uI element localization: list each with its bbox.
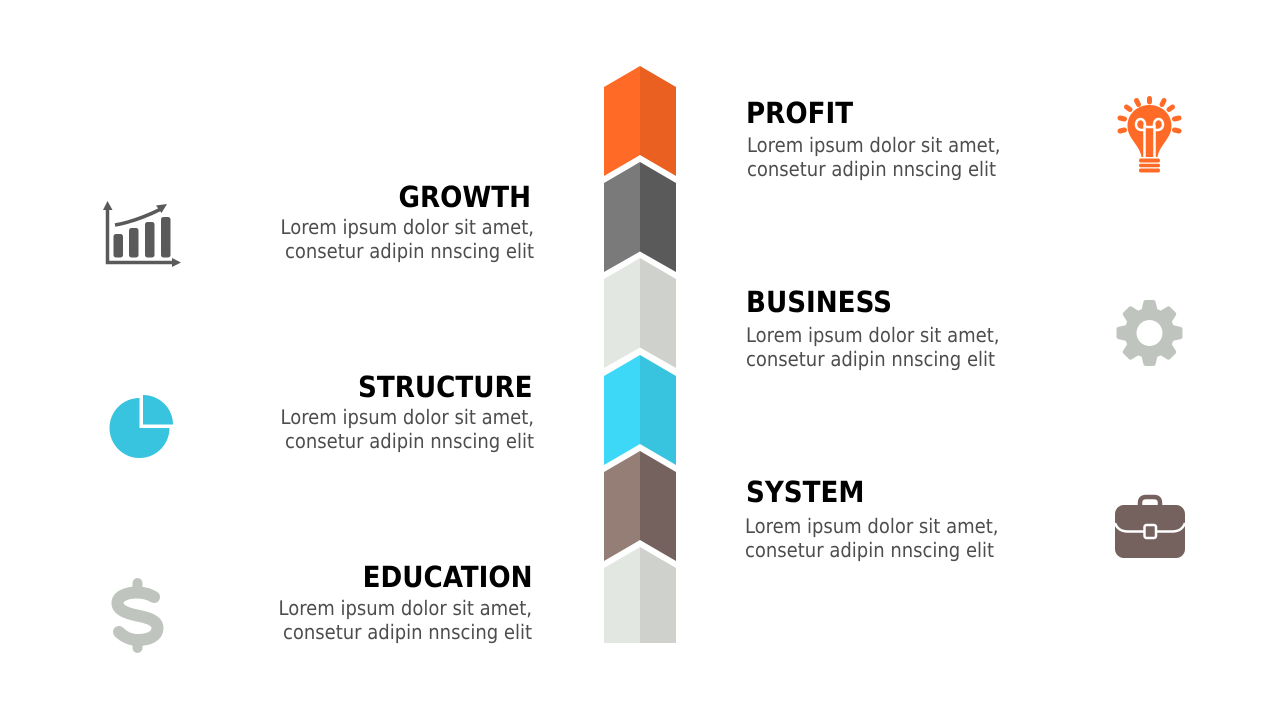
text block: system <box>745 475 998 562</box>
text block: education: consetur adipin nnscing elit <box>283 620 532 644</box>
chevron: light grey base <box>604 547 676 643</box>
text block: structure: Lorem ipsum dolor sit amet, <box>281 405 534 429</box>
text block: system: SYSTEM <box>746 475 864 509</box>
central chevron column <box>604 66 676 643</box>
chevron: brown <box>604 451 676 561</box>
text block: business: consetur adipin nnscing elit <box>746 347 995 371</box>
icon: light bulb <box>1120 98 1179 172</box>
text block: profit <box>746 96 1000 181</box>
chevron: dark grey <box>604 162 676 272</box>
text block: education: EDUCATION <box>363 560 532 594</box>
text block: structure: consetur adipin nnscing elit <box>285 429 534 453</box>
chevron: orange <box>604 66 676 176</box>
text block: structure <box>281 370 534 453</box>
text block: system: consetur adipin nnscing elit <box>745 538 994 562</box>
text block: growth: GROWTH <box>398 180 531 214</box>
text block: education: Lorem ipsum dolor sit amet, <box>279 596 532 620</box>
text block: education <box>279 560 532 644</box>
icon: pie chart <box>110 395 173 458</box>
text block: profit: Lorem ipsum dolor sit amet, <box>747 133 1000 157</box>
text block: growth: Lorem ipsum dolor sit amet, <box>281 215 534 239</box>
text block: profit: consetur adipin nnscing elit <box>747 157 996 181</box>
icon: gear <box>1116 300 1182 366</box>
chevron: blue <box>604 355 676 465</box>
icon: briefcase <box>1115 497 1185 558</box>
text block: business: Lorem ipsum dolor sit amet, <box>746 323 999 347</box>
text block: growth: consetur adipin nnscing elit <box>285 239 534 263</box>
text block: structure: STRUCTURE <box>358 370 532 404</box>
icon: dollar sign <box>118 583 158 648</box>
text block: business: BUSINESS <box>746 285 892 319</box>
text block: profit: PROFIT <box>746 96 853 130</box>
icon: growth chart <box>103 201 181 267</box>
text block: system: Lorem ipsum dolor sit amet, <box>745 514 998 538</box>
text block: growth <box>281 180 534 263</box>
chevron: light grey <box>604 258 676 368</box>
text block: business <box>746 285 999 371</box>
